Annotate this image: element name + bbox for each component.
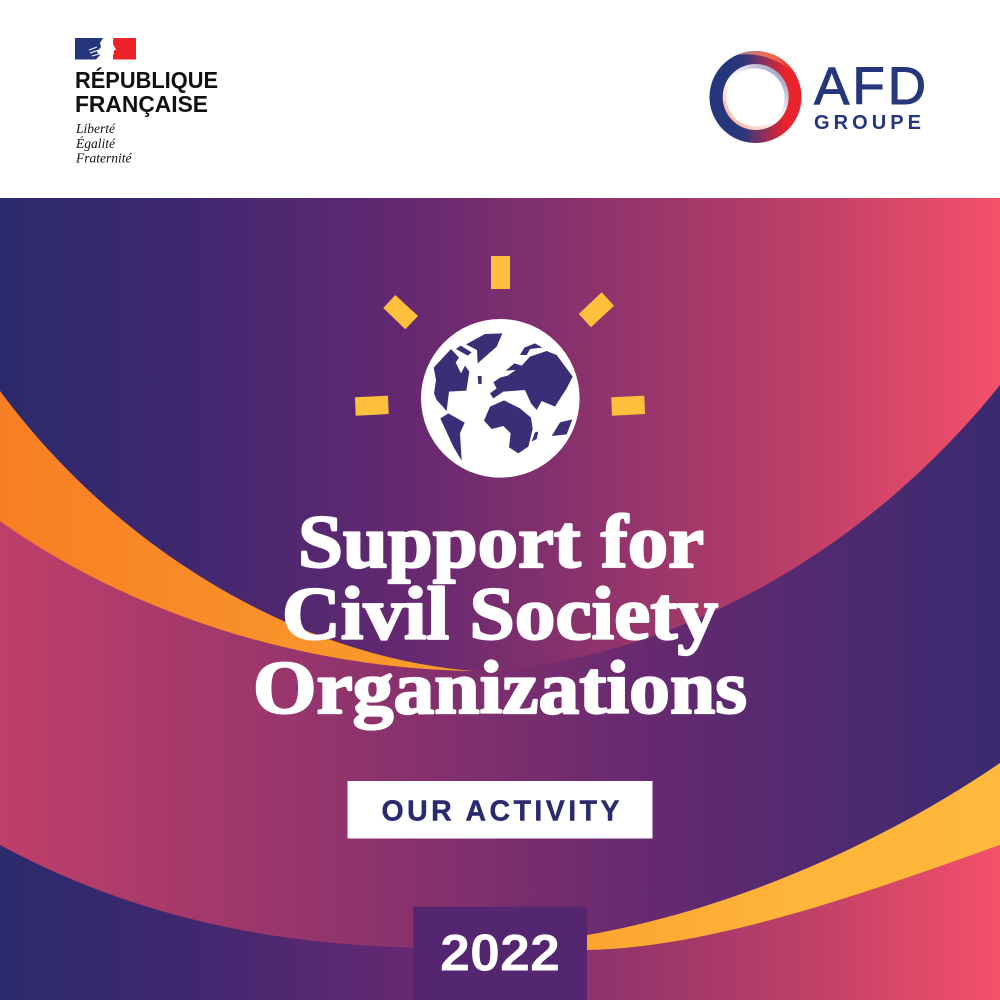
label: year xyxy=(413,907,587,1000)
label: our activity xyxy=(348,781,652,838)
title: Organizations xyxy=(253,647,747,730)
motto: Égalité xyxy=(75,136,116,151)
motto: Fraternité xyxy=(75,150,132,166)
motto: Liberté xyxy=(75,121,116,136)
band: orange swoosh xyxy=(0,391,473,671)
motto xyxy=(75,121,132,166)
label: year: 2022 xyxy=(440,925,560,983)
icon: French flag block xyxy=(75,38,136,60)
header background xyxy=(0,0,1000,198)
band: yellow swoosh xyxy=(587,763,1000,950)
wordmark: FRANÇAISE xyxy=(75,91,208,117)
wordmark: AFD xyxy=(814,57,926,116)
wordmark xyxy=(75,66,218,117)
icon: ring xyxy=(710,51,802,143)
band: middle reversed gradient xyxy=(0,385,1000,1000)
band: bottom gradient xyxy=(0,845,1000,1000)
icon: globe xyxy=(421,319,580,478)
title: Civil Society xyxy=(282,573,718,656)
wordmark: RÉPUBLIQUE xyxy=(75,66,218,93)
title: Support for xyxy=(298,501,704,584)
label: our activity: OUR ACTIVITY xyxy=(382,796,620,828)
rays around the globe xyxy=(355,256,645,416)
logo: République Française xyxy=(75,38,218,166)
logo: AFD Groupe xyxy=(710,51,926,143)
title xyxy=(253,501,747,730)
wordmark: GROUPE xyxy=(814,112,921,134)
